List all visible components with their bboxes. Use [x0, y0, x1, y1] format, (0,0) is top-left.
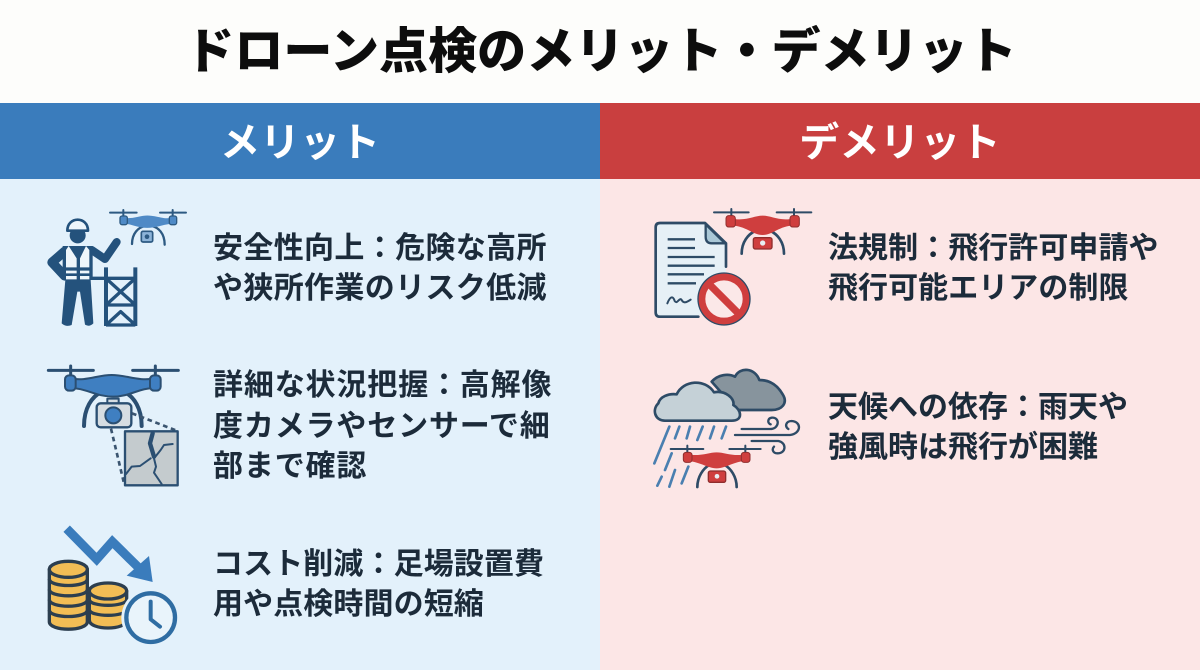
- text: detail: 詳細な状況把握：高解像: [213, 369, 552, 402]
- text: weather: 天候への依存：雨天や: [828, 391, 1128, 424]
- text: safety: 安全性向上：危険な高所: [213, 232, 547, 265]
- icon: worker with drone and scaffold: [47, 209, 187, 327]
- icon: document prohibited and drone: [654, 208, 812, 326]
- heading: demerits: デメリット: [799, 121, 1001, 165]
- panel: demerits background: [600, 179, 1200, 670]
- text: regulation: [828, 232, 1159, 304]
- text: regulation: 法規制：飛行許可申請や: [828, 232, 1159, 265]
- heading: demerits: [600, 103, 1200, 179]
- text: detail: [213, 369, 552, 483]
- panel: merits background: [0, 179, 600, 670]
- icon: storm clouds, wind and drone: [653, 368, 800, 488]
- text: detail: 度カメラやセンサーで細: [213, 410, 551, 442]
- text: weather: [828, 391, 1128, 464]
- text: regulation: 飛行可能エリアの制限: [828, 272, 1128, 304]
- icon: drone camera and crack: [46, 364, 180, 486]
- text: weather: 強風時は飛行が困難: [828, 430, 1098, 464]
- text: cost: 用や点検時間の短縮: [213, 588, 484, 620]
- text: safety: [213, 232, 547, 304]
- text: safety: や狭所作業のリスク低減: [213, 272, 547, 304]
- icon: falling cost coins and clock: [48, 526, 178, 644]
- heading: merits: メリット: [220, 121, 380, 165]
- heading: merits: [0, 103, 600, 179]
- text: cost: [213, 548, 544, 620]
- text: detail: 部まで確認: [213, 450, 367, 483]
- text: cost: コスト削減：足場設置費: [213, 548, 544, 581]
- title: ドローン点検のメリット・デメリット: [185, 25, 1017, 79]
